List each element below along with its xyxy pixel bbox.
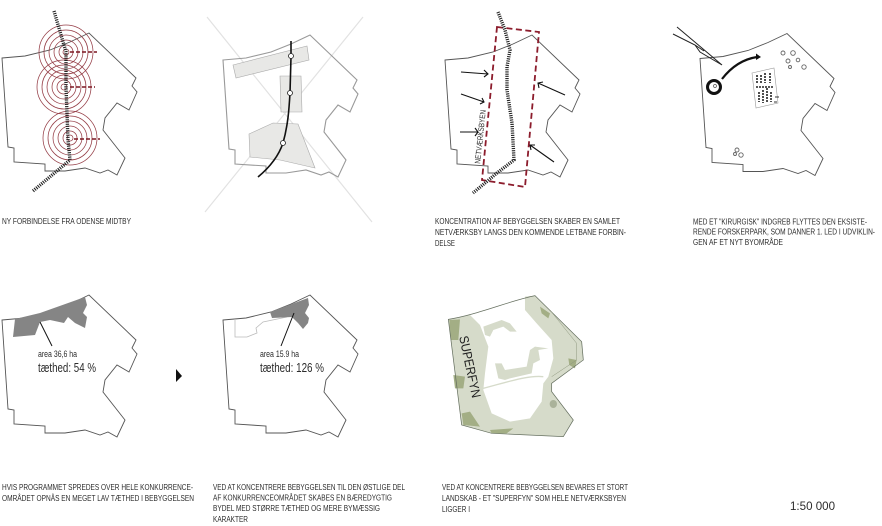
panel: surgical relocation of research park bbox=[673, 27, 875, 247]
zone north bbox=[233, 46, 309, 78]
caption 3 bbox=[435, 216, 626, 248]
former area ghost outline bbox=[235, 317, 287, 337]
ring around research park bbox=[708, 80, 720, 94]
crossed lines bbox=[205, 17, 372, 222]
label: Superfyn: SUPERFYN bbox=[456, 334, 484, 399]
caption 7: LIGGER I bbox=[442, 504, 470, 514]
caption 6: BYDEL MED STØRRE TÆTHED OG MERE BYMÆSSIG bbox=[213, 503, 380, 513]
caption 3: DELSE bbox=[435, 238, 455, 248]
rail line bbox=[473, 12, 514, 193]
density label: tæthed: 54 % bbox=[38, 361, 96, 375]
caption 5 bbox=[2, 482, 194, 503]
leader line bbox=[281, 313, 294, 346]
area label: area 15.9 ha bbox=[260, 349, 299, 359]
caption 5: OMRÅDET OPNÅS EN MEGET LAV TÆTHED I BEBYGGELSEN bbox=[2, 493, 194, 503]
panel: concentrated density bbox=[213, 295, 405, 524]
red dashed radii bbox=[70, 52, 100, 139]
caption 5: HVIS PROGRAMMET SPREDES OVER HELE KONKURRENCE- bbox=[2, 482, 193, 492]
caption 7: LANDSKAB - ET "SUPERFYN" SOM HELE NETVÆRKSBYEN bbox=[442, 493, 626, 503]
rail line bbox=[33, 11, 70, 191]
density area bbox=[270, 298, 309, 329]
caption 6: VED AT KONCENTRERE BEBYGGELSEN TIL DEN ØSTLIGE DEL bbox=[213, 482, 405, 492]
area label: area 36,6 ha bbox=[38, 349, 77, 359]
zone south bbox=[249, 123, 315, 168]
density label: tæthed: 126 % bbox=[260, 361, 324, 375]
caption 4: GEN AF ET NYT BYOMRÅDE bbox=[693, 237, 783, 247]
building clusters bbox=[734, 51, 806, 157]
caption 7 bbox=[442, 482, 629, 514]
caption 6 bbox=[213, 482, 405, 524]
site outline 6 bbox=[223, 295, 358, 437]
density area bbox=[13, 297, 87, 337]
zone middle bbox=[280, 76, 302, 112]
panel: three zones on light rail bbox=[205, 17, 372, 222]
caption 7: VED AT KONCENTRERE BEBYGGELSEN BEVARES ET STORT bbox=[442, 482, 629, 492]
scale label: 1:50 000 bbox=[790, 499, 835, 513]
site outline 2 bbox=[223, 35, 358, 177]
curved arrow bbox=[722, 54, 761, 79]
red dashed zone bbox=[482, 27, 539, 187]
panel: low density spread bbox=[2, 295, 194, 503]
caption 1: NY FORBINDELSE FRA ODENSE MIDTBY bbox=[2, 216, 131, 226]
caption 6: AF KONKURRENCEOMRÅDET SKABES EN BÆREDYGTIG bbox=[213, 492, 392, 502]
caption 4 bbox=[693, 216, 875, 247]
rail line with stops bbox=[258, 41, 294, 177]
concentric rings bbox=[37, 25, 97, 165]
panel: concentration along light rail bbox=[435, 12, 626, 248]
arrow: triangle between density panels bbox=[176, 369, 182, 382]
research park plan bbox=[752, 68, 779, 108]
site outline 5 bbox=[2, 295, 137, 437]
icon: scalpel bbox=[673, 27, 722, 65]
landscape map bbox=[448, 296, 583, 437]
caption 3: KONCENTRATION AF BEBYGGELSEN SKABER EN SAMLET bbox=[435, 216, 621, 226]
caption 6: KARAKTER bbox=[213, 514, 248, 524]
panel: Superfyn landscape bbox=[442, 296, 629, 514]
site outline 4 bbox=[700, 34, 835, 176]
arrows bbox=[460, 70, 565, 162]
panel: new connection from Odense centre bbox=[2, 11, 137, 226]
label: Netværksbyen: NETVÆRKSBYEN bbox=[473, 109, 488, 164]
leader line bbox=[40, 322, 52, 346]
caption 3: NETVÆRKSBY LANGS DEN KOMMENDE LETBANE FORBIN- bbox=[435, 227, 626, 237]
site outline 3 bbox=[445, 35, 580, 177]
site outline 1 bbox=[2, 33, 137, 175]
